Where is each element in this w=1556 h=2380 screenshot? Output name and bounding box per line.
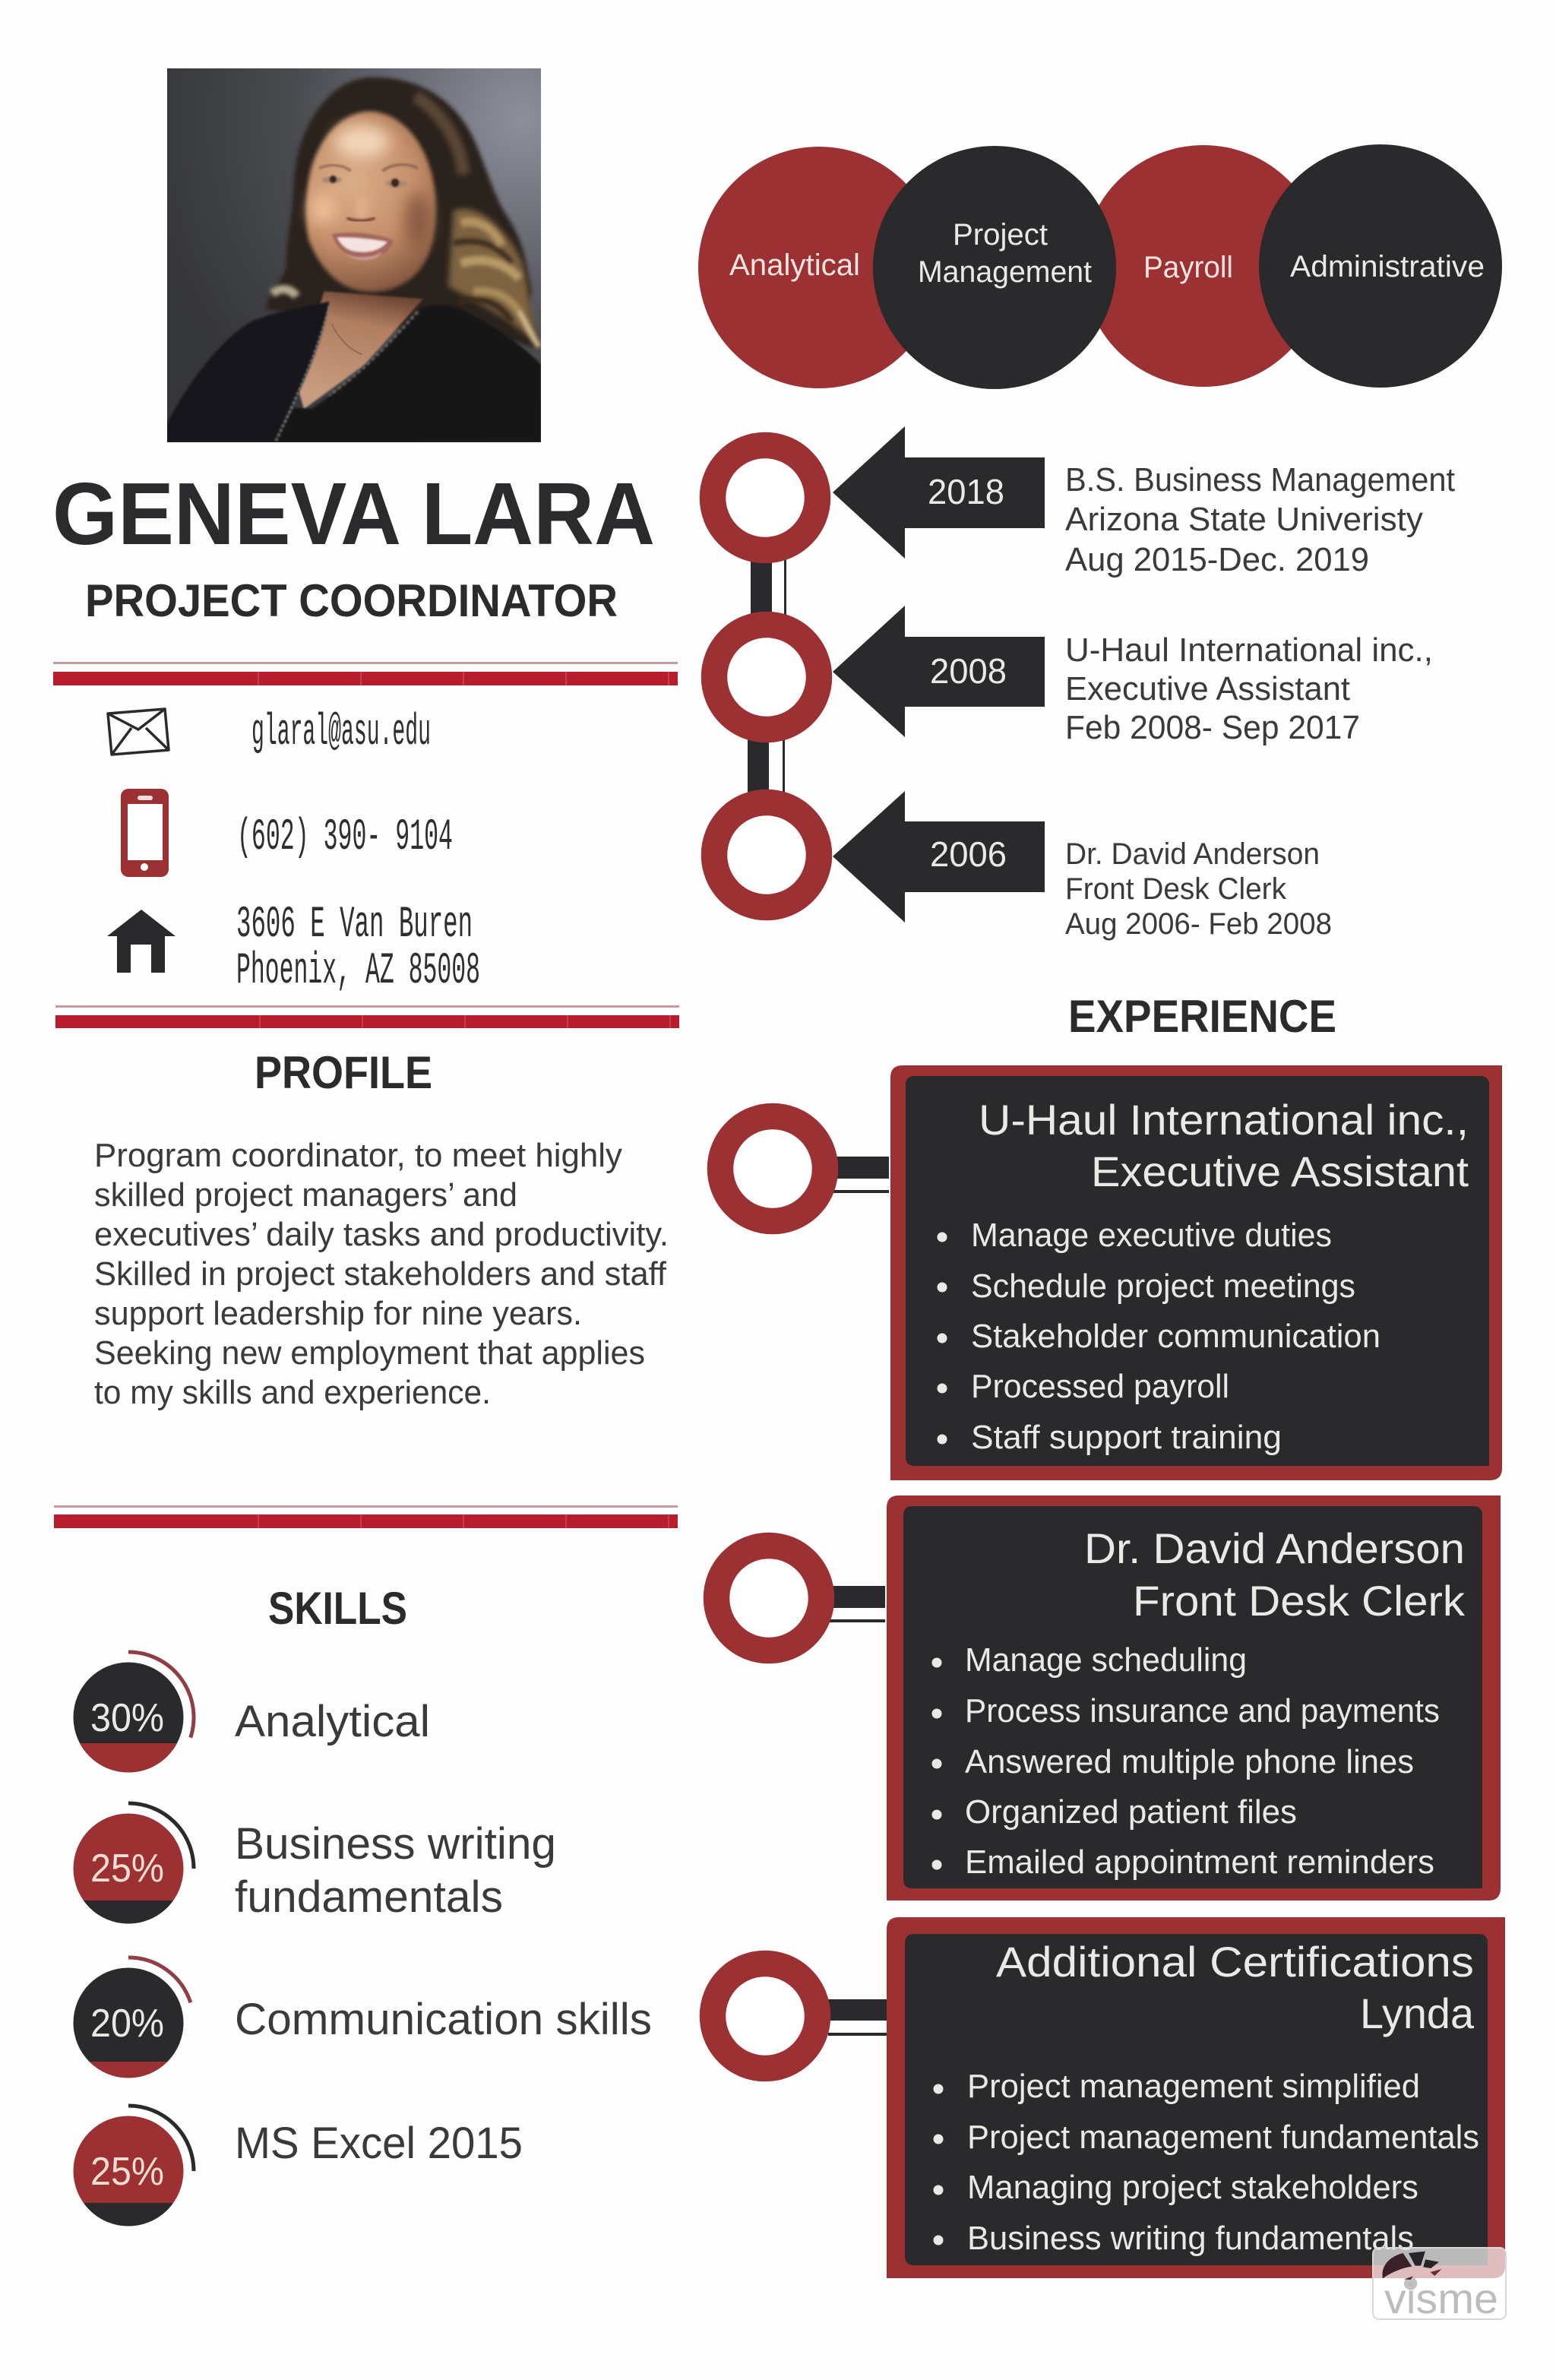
card list: Manage scheduling	[965, 1641, 1247, 1679]
text: job 2006: Dr. David Anderson	[1065, 837, 1320, 871]
contact: address	[236, 900, 480, 996]
card list: Process insurance and payments	[965, 1692, 1440, 1730]
arrow: 2018	[833, 426, 1045, 559]
skill: Business writing fundamentals 25%: 25%	[90, 1847, 164, 1891]
experience: Dr. David Anderson	[716, 1495, 1501, 1901]
circle: Payroll	[1083, 145, 1324, 387]
divider: profile	[54, 1505, 678, 1528]
card list: Project management fundamentals	[967, 2119, 1479, 2156]
text: job 2006: Front Desk Clerk	[1065, 872, 1287, 906]
text: education 2018: B.S. Business Management	[1065, 461, 1455, 498]
heading: experience: EXPERIENCE	[1068, 991, 1336, 1042]
text: education 2018: Arizona State Univeristy	[1065, 501, 1423, 538]
card list	[931, 1641, 1440, 1881]
card body	[903, 1506, 1482, 1888]
skill: Business writing fundamentals 25%	[73, 1803, 556, 1924]
card list: Managing project stakeholders	[967, 2169, 1418, 2206]
heading: skills: SKILLS	[268, 1583, 407, 1634]
circle: Administrative: Administrative	[1290, 250, 1485, 283]
card body	[905, 1934, 1488, 2265]
circle: Project Management: Management	[918, 255, 1092, 289]
card title: U-Haul International inc.,	[979, 1096, 1469, 1144]
profile text	[94, 1137, 669, 1411]
experience: U-Haul	[720, 1065, 1502, 1480]
card list: Manage executive duties	[971, 1217, 1332, 1254]
skill: Business writing fundamentals 25%: fundamentals	[235, 1872, 503, 1922]
ring	[716, 1546, 821, 1650]
text: job 2008: Feb 2008- Sep 2017	[1065, 709, 1360, 746]
ring: 2006	[714, 802, 819, 907]
skill: Analytical 30%: Analytical	[235, 1697, 430, 1746]
card list: Processed payroll	[971, 1368, 1229, 1405]
icon: house	[107, 910, 176, 973]
text: job 2008: Executive Assistant	[1065, 670, 1350, 707]
text: job 2008: U-Haul International inc.,	[1065, 631, 1433, 669]
connector	[830, 1586, 885, 1622]
card title: Executive Assistant	[1091, 1147, 1469, 1195]
contact: address: Phoenix, AZ 85008	[236, 947, 480, 996]
ring: 2018	[713, 445, 818, 550]
ring	[713, 1964, 818, 2068]
watermark: visme	[1373, 2248, 1506, 2322]
divider: header	[53, 662, 678, 685]
connector	[828, 1999, 887, 2036]
skill: MS Excel 2015 25%	[73, 2106, 523, 2227]
heading: profile: PROFILE	[255, 1047, 432, 1098]
contact: phone number: (602) 390- 9104	[237, 813, 453, 862]
arrow: 2018: 2018	[928, 472, 1004, 511]
circle: Project Management	[873, 146, 1116, 389]
arrow: 2008	[833, 606, 1045, 737]
circle: Analytical	[698, 147, 940, 388]
profile text: Skilled in project stakeholders and staff	[94, 1255, 667, 1293]
contact details	[107, 708, 480, 996]
card body	[906, 1076, 1489, 1466]
profile text: to my skills and experience.	[94, 1374, 491, 1411]
connector	[833, 1157, 889, 1193]
card title	[979, 1096, 1469, 1195]
skill: MS Excel 2015 25%: MS Excel 2015	[235, 2119, 523, 2168]
card title	[996, 1938, 1475, 2037]
arrow: 2006	[833, 791, 1045, 923]
text: job 2006: Aug 2006- Feb 2008	[1065, 907, 1332, 941]
skill: Analytical 30%: 30%	[90, 1696, 164, 1740]
icon: envelope	[108, 709, 169, 755]
card	[890, 1065, 1502, 1480]
skill: Business writing fundamentals 25%: Business writing	[235, 1819, 556, 1869]
photo: portrait of Geneva Lara	[167, 68, 541, 442]
profile text: skilled project managers’ and	[94, 1176, 517, 1214]
job title: PROJECT COORDINATOR	[85, 575, 618, 626]
card title: Dr. David Anderson	[1084, 1524, 1465, 1572]
skill: Communication skills 20%	[73, 1957, 652, 2078]
arrow: 2008: 2008	[930, 651, 1007, 691]
card list: Staff support training	[971, 1419, 1282, 1456]
text: job 2008	[1065, 631, 1433, 746]
contact details: glaral@asu.edu	[251, 708, 431, 758]
skill: Communication skills 20%: 20%	[90, 2002, 164, 2046]
connector	[748, 559, 786, 793]
icon: visme logo	[1382, 2252, 1441, 2290]
card list: Schedule project meetings	[971, 1268, 1355, 1305]
card	[887, 1917, 1505, 2278]
circle: Analytical: Analytical	[729, 248, 860, 282]
circle: Project Management: Project	[953, 218, 1048, 252]
text: job 2006	[1065, 837, 1332, 941]
circle: Administrative	[1259, 144, 1502, 388]
ring	[720, 1116, 825, 1221]
skill: MS Excel 2015 25%: 25%	[90, 2150, 164, 2194]
card	[887, 1495, 1501, 1901]
watermark: visme: visme	[1384, 2274, 1498, 2322]
profile text: support leadership for nine years.	[94, 1295, 582, 1332]
card title: Front Desk Clerk	[1133, 1577, 1466, 1625]
card list: Stakeholder communication	[971, 1318, 1380, 1355]
ring: 2008	[714, 625, 819, 730]
card list	[933, 2068, 1479, 2257]
divider: contact	[55, 1005, 679, 1028]
skill: Analytical 30%	[73, 1652, 430, 1772]
profile text: Program coordinator, to meet highly	[94, 1137, 622, 1174]
circle: Payroll: Payroll	[1143, 251, 1233, 284]
experience: Additional Certifications	[713, 1917, 1505, 2278]
profile text: Seeking new employment that applies	[94, 1334, 645, 1372]
card list: Answered multiple phone lines	[965, 1743, 1414, 1780]
card title: Additional Certifications	[996, 1938, 1474, 1986]
skill: Communication skills 20%: Communication skills	[235, 1995, 652, 2044]
card title	[1084, 1524, 1466, 1625]
card list: Business writing fundamentals	[967, 2220, 1414, 2257]
name heading: GENEVA LARA	[52, 464, 655, 563]
skill circles: strengths	[698, 144, 1502, 389]
card title: Lynda	[1360, 1989, 1475, 2037]
card list: Emailed appointment reminders	[965, 1844, 1434, 1881]
timeline: education and jobs	[713, 426, 1455, 941]
text: education 2018: Aug 2015-Dec. 2019	[1065, 541, 1369, 578]
card list: Organized patient files	[965, 1793, 1297, 1831]
text: education 2018	[1065, 461, 1455, 578]
card list: Project management simplified	[967, 2068, 1420, 2105]
icon: phone	[121, 789, 169, 877]
arrow: 2006: 2006	[930, 834, 1007, 874]
profile text: executives’ daily tasks and productivity.	[94, 1216, 669, 1253]
card list	[938, 1217, 1380, 1456]
contact: address: 3606 E Van Buren	[236, 900, 473, 950]
